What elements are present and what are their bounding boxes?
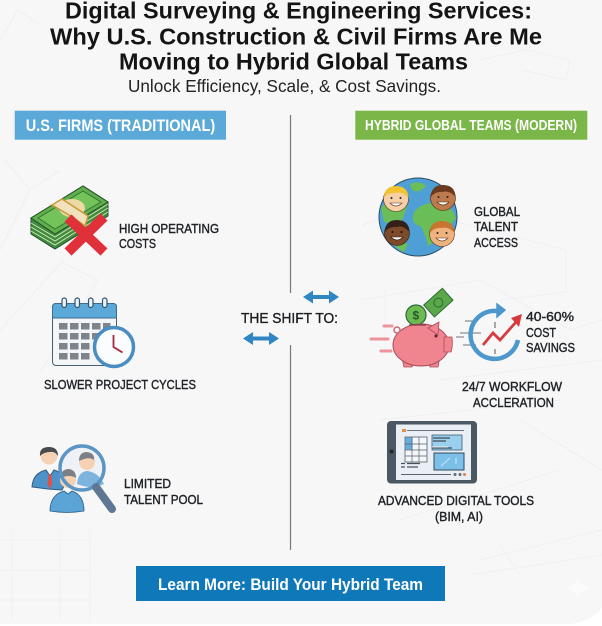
heading: U.S. firms [15, 111, 226, 140]
label: high operating costs: COSTS [119, 237, 156, 251]
label: 40-60% cost savings [526, 310, 575, 355]
label: 40-60% cost savings: COST [526, 326, 556, 340]
icon: globe with faces [379, 178, 457, 256]
label: global talent access: GLOBAL [474, 205, 520, 219]
panel: U.S. firms traditional [15, 111, 226, 512]
label: advanced digital tools: (BIM, AI) [435, 510, 483, 524]
label: 40-60% cost savings: SAVINGS [526, 341, 575, 355]
label: 24/7 workflow accleration: 24/7 WORKFLOW [462, 380, 562, 394]
label: 40-60% cost savings: 40-60% [526, 310, 574, 324]
label: limited talent pool: LIMITED [124, 477, 171, 491]
bottom edge strip [0, 608, 602, 626]
icon: face bottom left [384, 220, 410, 246]
icon: piggy bank with coin and bill: $ [412, 308, 420, 322]
panel: the shift [241, 290, 339, 345]
label: global talent access [474, 205, 520, 250]
icon: face top left [384, 186, 408, 212]
label: high operating costs: HIGH OPERATING [119, 222, 219, 236]
sparkle watermark [566, 576, 590, 600]
heading: U.S. firms: U.S. FIRMS (TRADITIONAL) [26, 117, 215, 135]
title: Moving to Hybrid Global Teams [119, 48, 468, 74]
arrow: top double arrow [303, 290, 339, 304]
panel: hybrid global teams modern [355, 111, 587, 524]
label: 24/7 workflow accleration: ACCLERATION [473, 396, 554, 410]
subtitle: Unlock Efficiency, Scale, & Cost Savings. [128, 76, 441, 96]
label: 24/7 workflow accleration [462, 380, 562, 410]
icon: face bottom right [430, 221, 454, 246]
call to action button [136, 566, 445, 601]
label: high operating costs [119, 222, 219, 251]
label: advanced digital tools [378, 494, 534, 524]
icon: money stack with red X [31, 186, 108, 252]
label: limited talent pool [124, 477, 203, 507]
center divider [290, 115, 292, 550]
icon: calendar with clock [52, 298, 134, 366]
icon: piggy bank with coin and bill [371, 288, 453, 367]
title: Why U.S. Construction & Civil Firms Are Me [50, 24, 542, 50]
title [50, 0, 542, 74]
icon: people under magnifying glass [32, 446, 112, 512]
icon: tablet with BIM drawing [387, 421, 477, 484]
label: slower project cycles: SLOWER PROJECT CYCLES [44, 378, 196, 392]
icon: face top right [430, 185, 456, 210]
label: the shift to: THE SHIFT TO: [241, 310, 338, 327]
label: limited talent pool: TALENT POOL [124, 493, 203, 507]
label: global talent access: TALENT [474, 220, 518, 234]
label: global talent access: ACCESS [474, 236, 518, 250]
arrow: bottom double arrow [243, 332, 279, 345]
heading: hybrid global teams [355, 111, 587, 140]
label: advanced digital tools: ADVANCED DIGITAL TOOLS [378, 494, 534, 508]
call to action button: Learn More: Build Your Hybrid Team [158, 576, 423, 594]
icon: cycle with rising arrow [456, 304, 522, 359]
